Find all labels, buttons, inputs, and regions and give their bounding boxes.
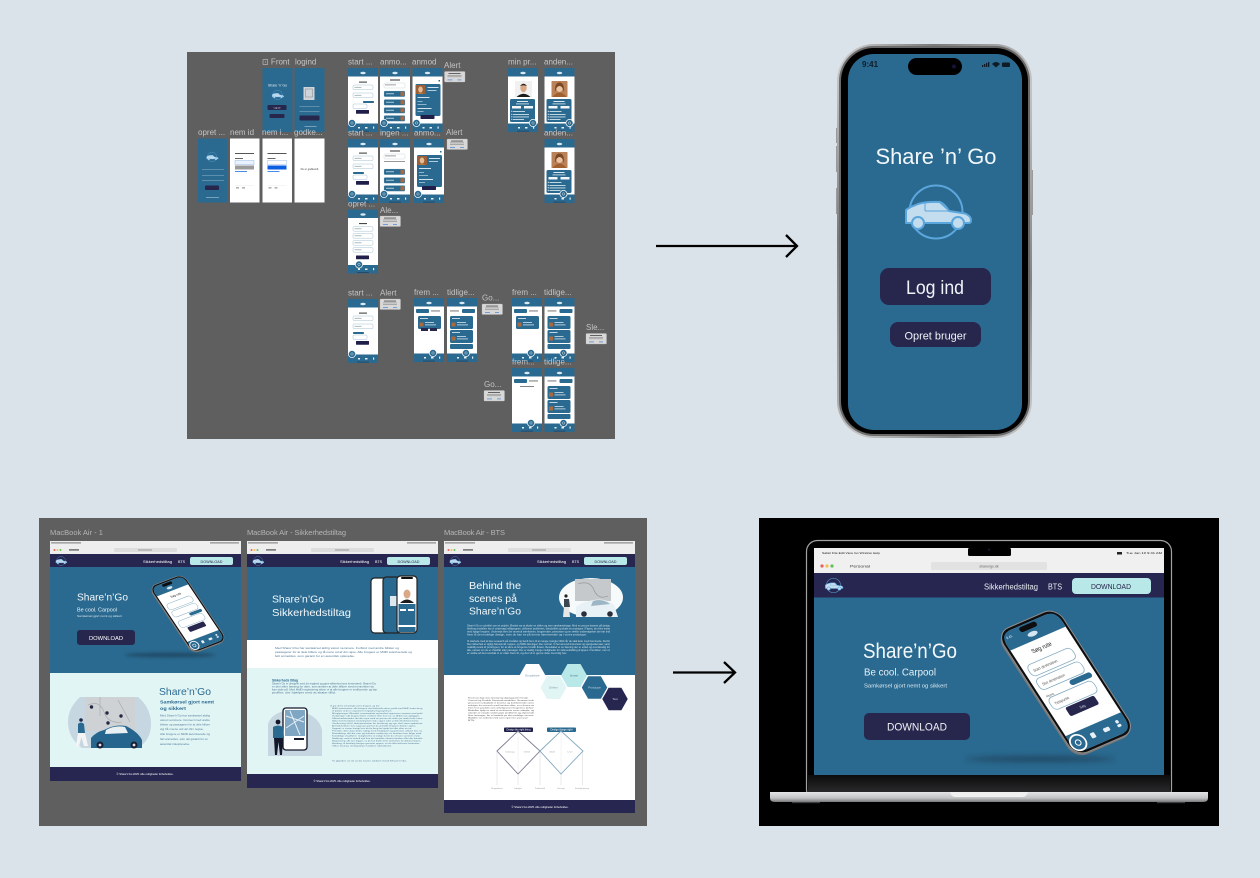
frame: fremtidige 1: frem ...	[414, 288, 439, 297]
frame: behind the scenes page: DOWNLOAD	[594, 560, 617, 564]
double diamond diagram: Definér	[524, 752, 531, 754]
frame: tidligere 1	[447, 288, 477, 362]
safety measures list: Vilkår: brud på retningslinjer medfører udelukkelse.	[332, 744, 392, 748]
frame: anmod: anmod	[412, 58, 436, 66]
intro paragraphs: Share'n'Go er udviklet som et projekt. Ønsket var at skabe en sikker og nem samkørselsapp. Med en proces baseret på design	[467, 624, 611, 628]
frame: nem id kode: nem i...	[262, 128, 288, 137]
arrow: wireframes to phone	[656, 235, 797, 257]
frame: anmodning 2: anmo...	[414, 128, 441, 138]
frame: fremtidige 2: frem ...	[512, 288, 537, 297]
safety measures list: Registrering: alle ture logges, så de kan findes frem ved behov for dokumentation.	[332, 740, 421, 742]
frame: start 2: start ...	[348, 128, 372, 138]
frame: nem id	[230, 128, 260, 202]
illustration: phone and person	[268, 708, 322, 756]
frame: anmod	[412, 58, 442, 132]
section paragraph: bilister og passagerer for at dele billure	[160, 724, 211, 726]
frame: fremtidige 1	[414, 288, 444, 362]
frame: tidligere 3: tidlige...	[544, 358, 572, 366]
intro paragraphs: Vi startede med at lave research på området og fandt frem til at mange mangler tillid når de skal køre med fremmede. Derfor	[467, 640, 610, 643]
alert 6	[586, 323, 606, 344]
double diamond diagram: Undersøg	[506, 752, 514, 754]
section paragraph: og få mere ud af din rejse.	[160, 728, 205, 731]
intro paragraphs	[467, 624, 611, 655]
section paragraph: autentisk rideoplevelse.	[160, 743, 190, 746]
intro paragraph: passagerer for at dele billure og få mere ud af din rejse. Alle brugere er MitID autoriserede og	[275, 650, 412, 654]
site nav bar	[814, 573, 1164, 598]
hero heading: Share’n’Go	[469, 606, 521, 618]
section paragraph: været nemmere. Connect med andre	[160, 719, 211, 722]
process paragraph	[468, 696, 535, 722]
panel: mobile wireframes board	[187, 52, 615, 439]
frame: behind the scenes page: © Share'n'Go 2025. Alle rettigheder forbeholdes.	[512, 806, 569, 809]
alert 6: Sle...	[586, 323, 604, 332]
process paragraph: Modellen ses nedenfor med vores egne trin i processen	[468, 716, 529, 720]
safety measures list: Anmeld-funktion: hvis noget går galt kan du anmelde brugeren direkte i appen.	[332, 724, 416, 728]
tilted phone: Søg rute	[169, 591, 182, 599]
frame: safety page: BTS	[375, 560, 382, 564]
frame: landing page: Sikkerhedstiltag	[143, 560, 172, 564]
frame: opret	[198, 128, 228, 202]
site nav bar: BTS	[1048, 582, 1062, 592]
frame: anmodninger 1: anmo...	[380, 58, 407, 66]
button: log ind: Log ind	[906, 278, 964, 299]
frame: Front: Log ind	[274, 108, 280, 110]
frame: min profil	[508, 58, 538, 132]
safety measures list: MitID-autorisation: alle brugere skal bekræfte deres profil med MitID inden brug.	[332, 707, 423, 710]
frame: anmodning 2	[414, 128, 444, 203]
safety measures list: Vi glæder os til at du kører sikkert med Share'n'Go.	[332, 760, 408, 762]
safety measures list: Verificering af bil: dokumentation for forsikring og syn skal være opdateret.	[332, 722, 423, 725]
frame: landing page: MacBook Air - 1	[50, 528, 103, 537]
process paragraph: sikrede at vi både undersøgte problemet og afprøvede	[468, 712, 535, 714]
tilted phone mockup	[994, 607, 1137, 759]
site hero	[814, 598, 1164, 775]
frame: fremtidige tom	[512, 358, 542, 432]
intro paragraphs: er stolte af det resultat vi er nået frem til, og det vil vi gerne dele med dig her.	[467, 652, 567, 655]
safety heading and paragraph: kan stole på. Med MitID-registrering sikrer vi at alle brugere er verificerede og har	[272, 688, 377, 692]
status bar time: 9:41	[862, 60, 879, 69]
frame: landing page: Samkørsel gjort nemt	[160, 700, 214, 706]
frame: tidligere 1: tidlige...	[447, 288, 475, 297]
frame: start 2	[348, 128, 378, 203]
design thinking hexagons: Test	[612, 697, 618, 701]
process paragraph: BTS.	[468, 720, 476, 722]
double diamond diagram: Koncept	[557, 787, 565, 790]
hero heading: Share’n’Go	[77, 592, 128, 604]
frame: safety page: MacBook Air - Sikkerhedstiltag	[247, 528, 346, 537]
intro paragraph	[275, 646, 412, 658]
frame: fremtidige 2	[512, 288, 542, 362]
illustration: map and white car	[559, 578, 623, 617]
alert 7	[484, 380, 504, 401]
intro paragraphs: thinking-modellen har vi undersøgt målgruppen, defineret problemet, idéudviklet og skabt en prototype i Figma, der blev testet	[467, 628, 610, 630]
frame: godkendt	[294, 128, 324, 202]
safety measures list: Vi gør alt for at beskytte vores brugere, og har:	[330, 704, 380, 708]
tilted phone mockup: Slut destination	[1041, 673, 1066, 687]
design thinking hexagons: Empathize	[525, 674, 540, 678]
safety measures list: Sikker kommunikation: beskedsystem inde i appen uden at dele dit telefonnummer.	[332, 720, 419, 722]
frame: safety page: Sikkerhedstiltag	[272, 607, 351, 619]
hero heading: Behind the	[469, 580, 521, 592]
panel: laptop mockup	[759, 518, 1219, 826]
frame: start 3	[348, 288, 378, 363]
safety measures list: Privatliv: dine data deles aldrig med tredjepart og gemmes sikkert hos os.	[332, 730, 423, 732]
frame: nem id kode	[262, 128, 292, 202]
frame: godkendt: godke...	[294, 128, 322, 137]
process paragraph: frem til et produkt som virkelig løser brugernes behov.	[468, 706, 535, 710]
design thinking hexagons: Prototype	[588, 686, 601, 690]
design thinking hexagons: Ideate	[570, 674, 579, 678]
intro paragraphs: blev sikkerhed et vigtigt fokuspunkt i appen, og MitID-løsningen blev central. Vi har anvendt interviews og spørgeskemaer, samt	[467, 643, 610, 646]
frame: landing page	[50, 528, 241, 781]
app title: Share ’n’ Go	[876, 144, 996, 169]
double diamond diagram: Indsigter	[514, 787, 522, 790]
safety heading and paragraph: Sikkerheds tiltag	[272, 678, 298, 682]
alert 3: Ale...	[380, 206, 398, 215]
three phones	[371, 576, 417, 633]
frame: behind the scenes page	[444, 528, 635, 813]
frame: start 1	[348, 58, 378, 132]
frame: opret rute	[348, 200, 378, 274]
frame: logind	[294, 58, 324, 132]
frame: start 1: start ...	[348, 58, 372, 66]
status bar icons	[982, 62, 1010, 68]
tilted phone	[148, 574, 228, 654]
browser chrome	[814, 548, 1164, 573]
safety measures list: Vurderinger: alle brugere bliver vurderet efter hver tur, så tilliden kan opbygges.	[332, 714, 420, 718]
frame: safety page	[247, 528, 438, 788]
frame: opret: opret ...	[198, 128, 225, 137]
design thinking hexagons: Define	[549, 686, 558, 690]
hero heading: Share’n’Go	[272, 594, 324, 606]
section paragraph: ført anmeldes, som del garanti for en	[160, 738, 209, 741]
double diamond diagram: Design the right thing	[506, 729, 531, 732]
button: log ind	[880, 268, 991, 305]
process paragraph: flere løsninger, før vi landede på den endelige version.	[468, 714, 534, 717]
safety measures list	[330, 704, 423, 762]
safety heading and paragraph: Share'n'Go er designet med din tryghed og gavn-sikkerhed som kerneværdi. Share'n'Go	[272, 682, 377, 686]
section heading: Share’n’Go	[159, 686, 211, 698]
hero heading	[469, 580, 521, 618]
tilted phone mockup: 9:41	[1005, 634, 1013, 640]
site nav bar: Sikkerhedstiltag	[984, 582, 1038, 592]
frame: behind the scenes page: BTS	[572, 560, 579, 564]
frame: anden profil 2	[544, 128, 574, 203]
frame: opret rute: opret ...	[348, 200, 375, 208]
safety measures list: Sikkerhedskontakt: del din rejse med en person du stoler på under hele ruten.	[332, 717, 423, 720]
safety heading and paragraph	[272, 678, 377, 694]
hero subtitle: Samkørsel gjort nemt og sikkert	[864, 684, 948, 690]
alert 4	[380, 288, 400, 310]
hero download button	[864, 713, 970, 740]
download button: DOWNLOAD	[89, 636, 123, 642]
frame: anden profil 1: anden...	[544, 58, 573, 66]
icon: car logo	[906, 186, 971, 238]
frame: start 3: start ...	[348, 288, 372, 298]
alert 1	[444, 61, 465, 82]
double diamond diagram: Udvikl	[549, 752, 555, 754]
section paragraph: Med Share'n'Go har samkørsel aldrig	[160, 714, 211, 718]
tilted phone mockup: Start destination	[1032, 659, 1059, 673]
frame: landing page: Be cool. Carpool	[77, 608, 117, 614]
safety heading and paragraph: er den sikre løsning for dem, som ønsker at dele billure med mennesker du	[272, 686, 375, 688]
panel: website wireframes board	[39, 518, 647, 826]
safety measures list: Rutedeling: del din rute og lokation undervejs så familien kan følge med.	[332, 732, 423, 735]
frame: landing page: DOWNLOAD	[200, 560, 223, 564]
hero tagline: Be cool. Carpool	[864, 668, 936, 678]
phone shadow	[965, 756, 1115, 762]
frame: logind: logind	[295, 58, 316, 66]
frame: ingen anmodninger: ingen ...	[380, 128, 408, 138]
safety measures list: Vi tjekker at de er registreret i Digitaliseringsstyrelsen.	[332, 710, 392, 712]
frame: tidligere 2: tidlige...	[544, 288, 572, 297]
download button	[77, 630, 135, 645]
tilted phone mockup: Tidspunkt	[1054, 696, 1071, 706]
button: opret bruger	[890, 322, 981, 347]
browser chrome: sharengo.dk	[979, 564, 999, 568]
process paragraph: indsigter fra research med kreative idéer, så vi kunne nå	[468, 704, 535, 707]
frame: godkendt: Du er godkendt	[301, 167, 319, 171]
frame: landing page: Samkørsel gjort nemt og sikkert	[77, 614, 122, 618]
double diamond diagram: Lever	[567, 752, 573, 754]
arrow: wireframes to laptop	[673, 662, 735, 683]
safety measures list: Kvindelige chauffører: mulighed for at vælge hvem du vil køre sammen med.	[332, 734, 420, 738]
tilted phone mockup: Afgang	[1045, 691, 1055, 698]
process paragraph: processen arbejdede vi iterativt, og kombinerede vores	[468, 702, 535, 704]
alert 2	[446, 128, 468, 150]
frame: Front: ⊡ Front	[262, 58, 290, 66]
alert 4: Alert	[380, 288, 397, 298]
process paragraph: Processen bag vores løsning tog udgangspunkt i Design	[468, 696, 529, 700]
safety measures list: Support: vi svarer hurtigt hvis du får brug for hjælp før eller efter en tur.	[332, 727, 412, 730]
frame: safety page: DOWNLOAD	[398, 560, 420, 564]
frame: safety page: © Share'n'Go 2025. Alle rettigheder forbeholdes.	[314, 780, 371, 783]
site nav bar: DOWNLOAD	[1091, 584, 1131, 591]
intro paragraphs: frem til det endelige design, som du kan se på denne hjemmeside og i vores prototype.	[467, 634, 587, 636]
intro paragraph: Med Share'n'Go har samkørsel aldrig været nemmere. Forbind med andre bilister og	[275, 646, 399, 650]
safety measures list: Betaling: al betaling foregår gennem appen, så du ikke behøver kontanter.	[332, 742, 420, 745]
frame: behind the scenes page: MacBook Air - BTS	[444, 528, 505, 537]
double diamond diagram: Brugerbehov	[491, 788, 503, 790]
illustration: carpool map	[68, 697, 151, 748]
intro paragraphs: usability-tests af prototypen, for at sikre at brugerne forstår flowet. Resultatet er en løsning der er enkel og overskuelig for	[467, 646, 610, 649]
process paragraph: Council og Double Diamond-modellen. Gennem hele	[468, 700, 535, 702]
frame: behind the scenes page: Sikkerhedstiltag	[537, 560, 566, 564]
frame: ingen anmodninger	[380, 128, 410, 203]
phone mockup: login screen	[836, 44, 1033, 438]
frame: min profil: min pr...	[508, 58, 536, 66]
browser chrome: Personal	[850, 564, 870, 568]
safety measures list: Nødknap: med et enkelt tryk kan du kontakte alarmcentralen eller din kontakt.	[332, 737, 423, 740]
alert 5	[482, 294, 502, 314]
double diamond diagram: Design things right	[550, 729, 573, 732]
double diamond diagram	[491, 728, 589, 790]
frame: anden profil 2: anden...	[544, 128, 573, 138]
browser chrome: Safari File Edit View Go Window Help	[822, 551, 881, 555]
frame: nem id: nem id	[230, 128, 254, 137]
alert 7: Go...	[484, 380, 501, 389]
frame: landing page: BTS	[178, 560, 185, 564]
section paragraph	[160, 714, 211, 746]
frame: safety page: Sikkerhedstiltag	[340, 560, 369, 564]
button: opret bruger: Opret bruger	[904, 330, 967, 342]
design thinking hexagons	[520, 664, 628, 710]
alert 2: Alert	[446, 128, 463, 137]
hero heading: scenes på	[469, 593, 517, 605]
frame: anden profil 1	[544, 58, 574, 132]
hero download button: DOWNLOAD	[887, 722, 947, 734]
frame: Front: Share 'n' Go	[268, 84, 287, 88]
browser chrome: Tue Jan 10 9:41 AM	[1126, 551, 1163, 555]
tilted phone mockup: Søg	[1079, 704, 1087, 710]
intro paragraphs: med rigtige brugere. Undervejs blev der anvendt wireframes, brugerrejser, personaer og en række undersøgelser der har ledt	[467, 630, 610, 634]
laptop body	[770, 540, 1208, 803]
safety measures list: Bil-oplysninger: Bilmodel, nummerplade og kørekort registreres sammen med profil.	[332, 712, 423, 715]
frame: tidligere 3	[544, 358, 574, 432]
alert 1: Alert	[444, 61, 461, 70]
process paragraph: Modellen hjalp os med at strukturere vores arbejde, og	[468, 709, 535, 712]
double diamond diagram: Problemfelt	[535, 787, 545, 790]
hero title: Share’n’Go	[863, 640, 957, 663]
frame: landing page: © Share'n'Go 2025. Alle rettigheder forbeholdes.	[116, 773, 174, 776]
frame: tidligere 2	[544, 288, 574, 362]
alert 5: Go...	[482, 294, 499, 302]
frame: Front	[262, 58, 292, 132]
alert 3	[380, 206, 400, 226]
frame: anmodninger 1	[380, 58, 410, 132]
intro paragraphs: alle, uanset om du er chauffør eller passager. Der er stadig mange muligheder for videreudvikling af appen i fremtiden, men vi	[467, 649, 611, 652]
intro paragraph: ført anmeldes, som garanti for en autentisk oplevelse.	[275, 654, 355, 658]
double diamond diagram: Endelig løsning	[575, 788, 589, 790]
section paragraph: Alle brugere er MitID autoriserede og	[160, 733, 211, 736]
tilted phone mockup: Søg rute	[1031, 641, 1054, 655]
frame: fremtidige tom: frem...	[512, 358, 535, 366]
safety heading and paragraph: profiler, der hjælper med at skabe tillid.	[272, 692, 337, 694]
frame: landing page: og sikkert	[160, 706, 186, 712]
